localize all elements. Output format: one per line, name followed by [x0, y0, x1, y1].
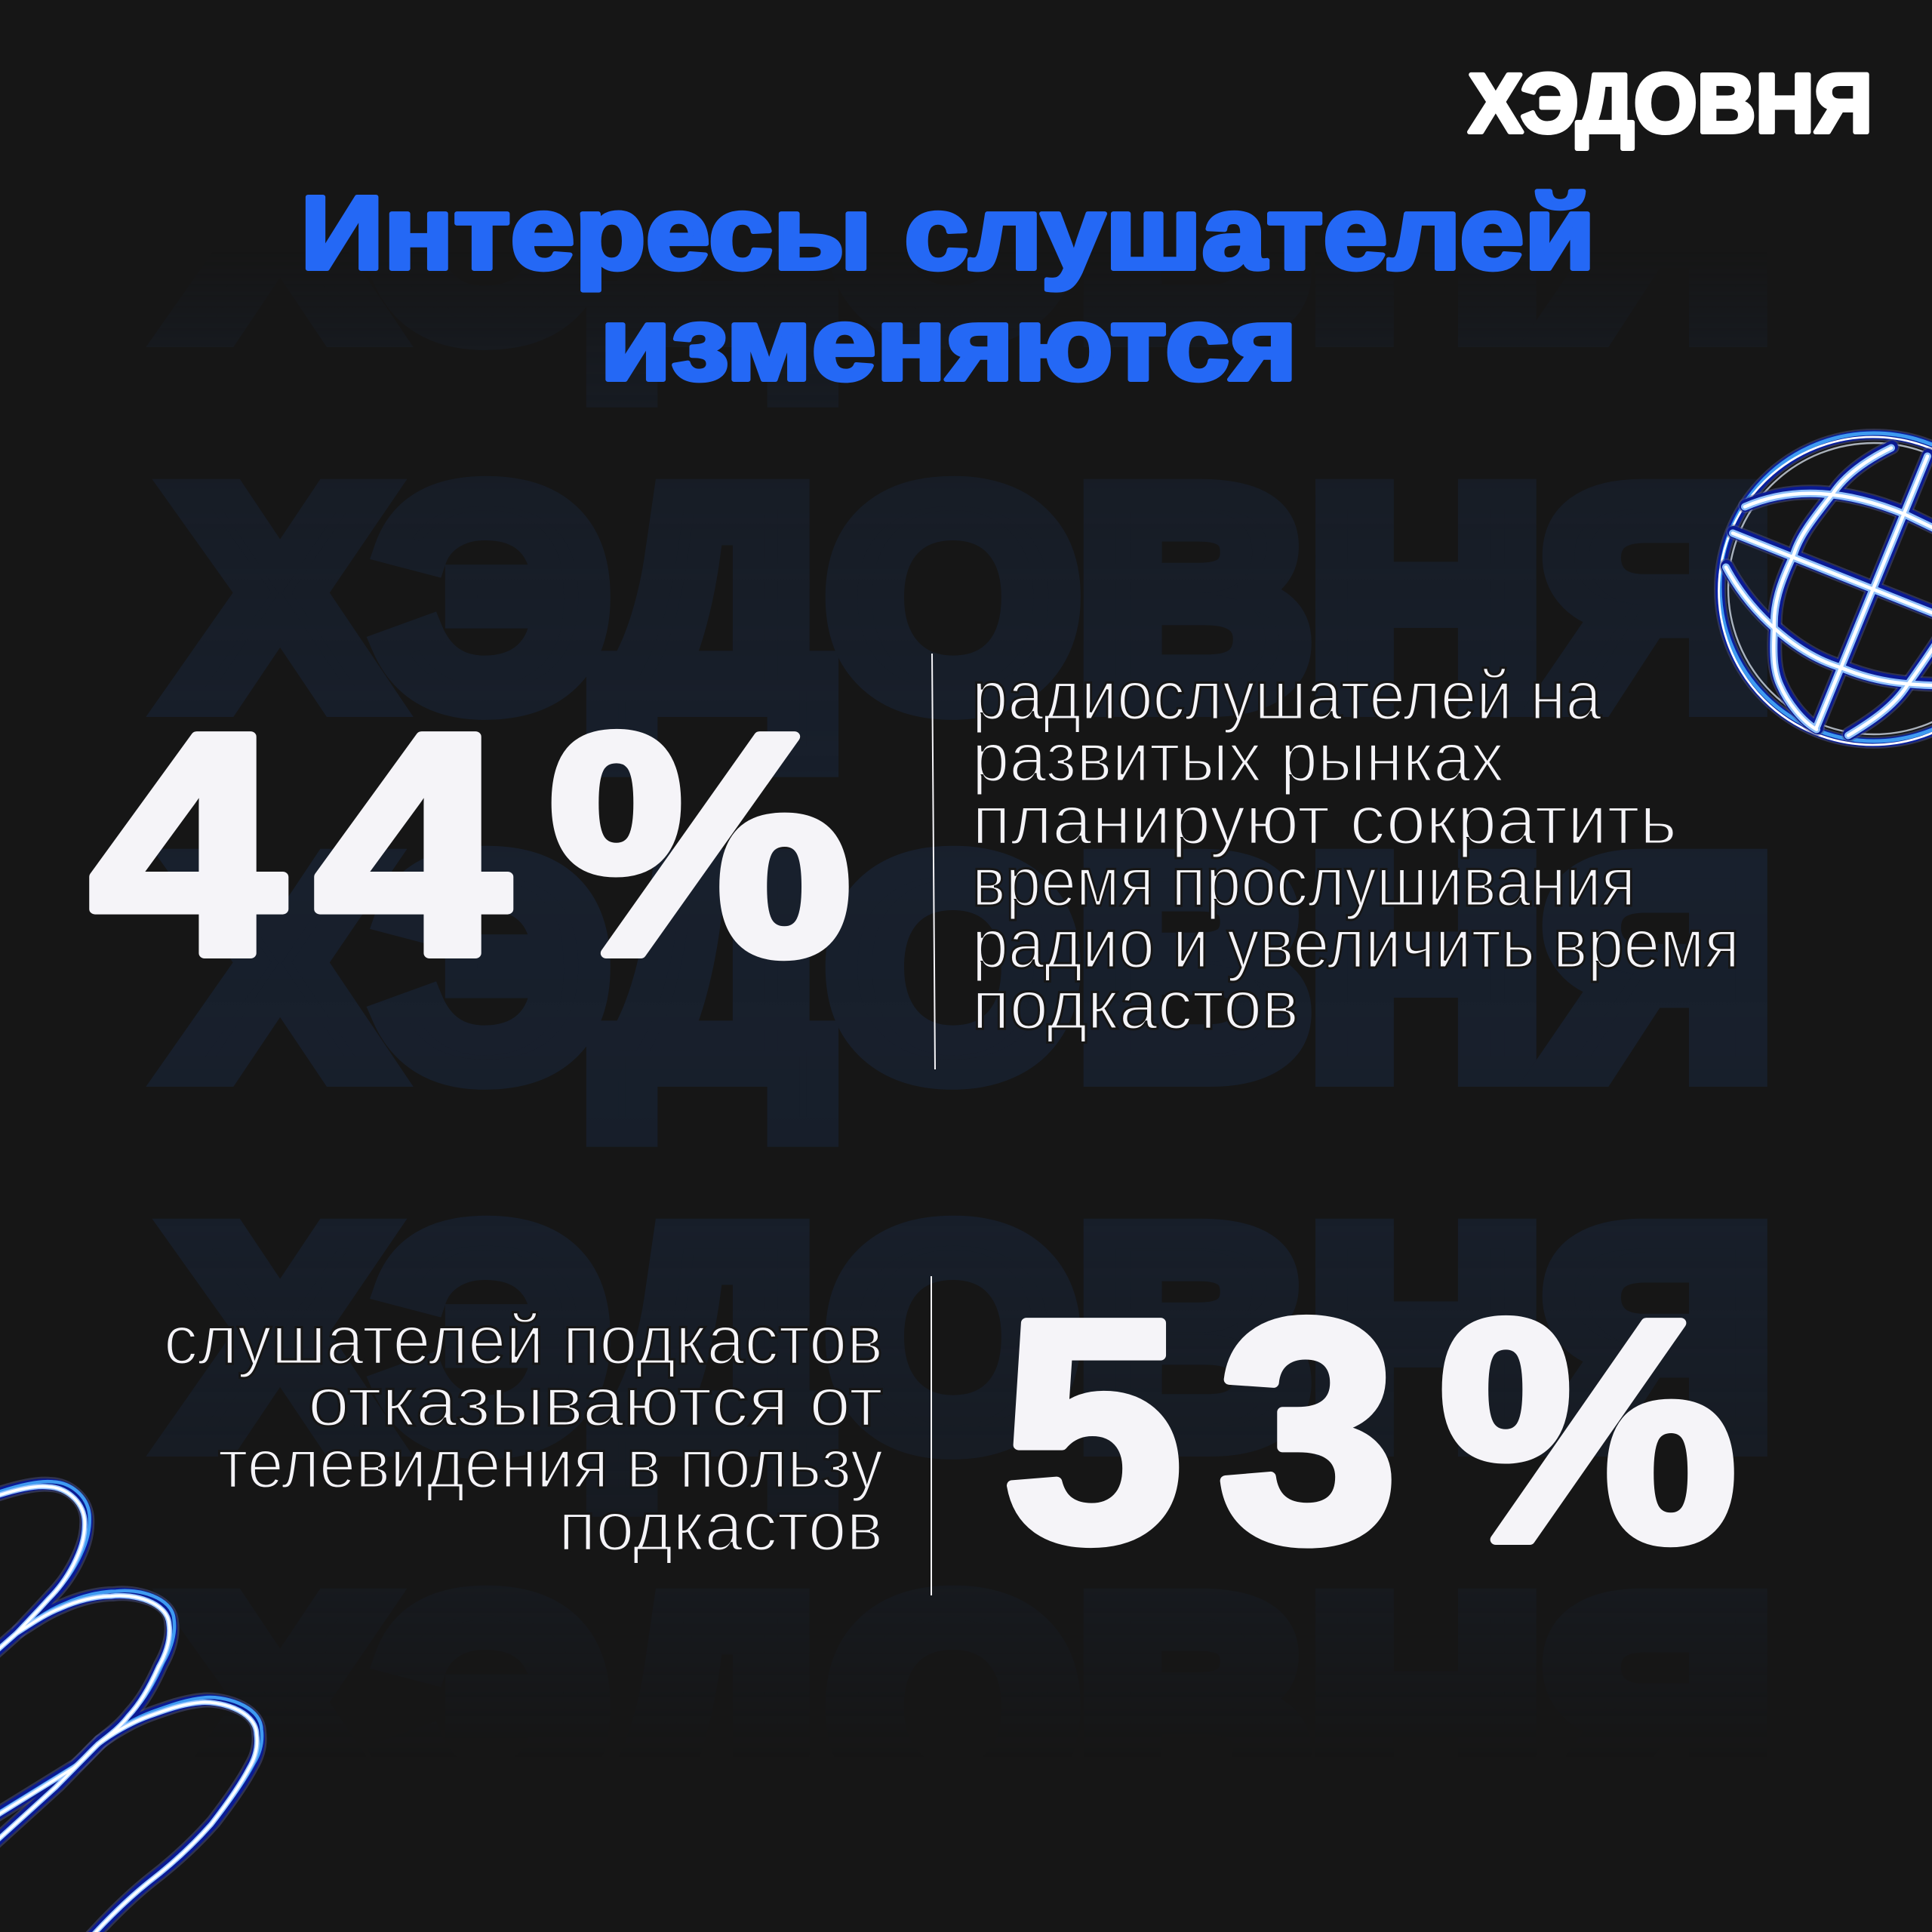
watermark: repeated brand name: ХЭДОВНЯ [173, 429, 1773, 766]
divider [931, 1276, 932, 1595]
description text: радиослушателей на [972, 657, 1602, 734]
description text: телевидения в пользу [218, 1426, 883, 1503]
divider [932, 654, 935, 1069]
description text: отказываются от [308, 1364, 883, 1441]
logo: ХЭДОВНЯ [1469, 57, 1872, 150]
big number 53%: 5 [1002, 1256, 1183, 1607]
watermark: repeated brand name: ХЭДОВНЯ [173, 798, 1773, 1136]
description text: подкастов [558, 1488, 883, 1565]
watermark: repeated brand name: ХЭДОВНЯ [173, 59, 1773, 396]
title: изменяются [600, 286, 1297, 402]
big number 53%: 3 [1218, 1256, 1398, 1607]
icon: chrome wire globe [1719, 433, 1932, 745]
title: Интересы слушателей [300, 175, 1595, 291]
icon: chrome wire spiral [0, 1481, 262, 1932]
description text: планируют сократить [972, 782, 1677, 859]
description text: развитых рынках [972, 719, 1504, 796]
stat block: 53 percent [164, 1256, 1737, 1607]
watermark: repeated brand name [146, 346, 1767, 1517]
description text: время прослушивания [972, 844, 1635, 921]
watermark: repeated brand name: ХЭДОВНЯ [173, 1168, 1773, 1506]
big number 44% [90, 669, 852, 1020]
title [300, 175, 1595, 402]
big number 44%: 4 [315, 669, 512, 1020]
stat block: 44 percent [90, 654, 1740, 1069]
description text: слушателей подкастов [164, 1302, 883, 1379]
big number 44%: 4 [90, 669, 287, 1020]
big number 53% [1002, 1256, 1737, 1607]
watermark: repeated brand name: ХЭДОВНЯ [173, 1538, 1773, 1875]
description text: радио и увеличить время [972, 906, 1740, 983]
description text [164, 1302, 883, 1565]
big number 44%: % [549, 669, 852, 1020]
description text: подкастов [972, 967, 1299, 1044]
big number 53%: % [1439, 1256, 1737, 1607]
description text [972, 657, 1740, 1044]
